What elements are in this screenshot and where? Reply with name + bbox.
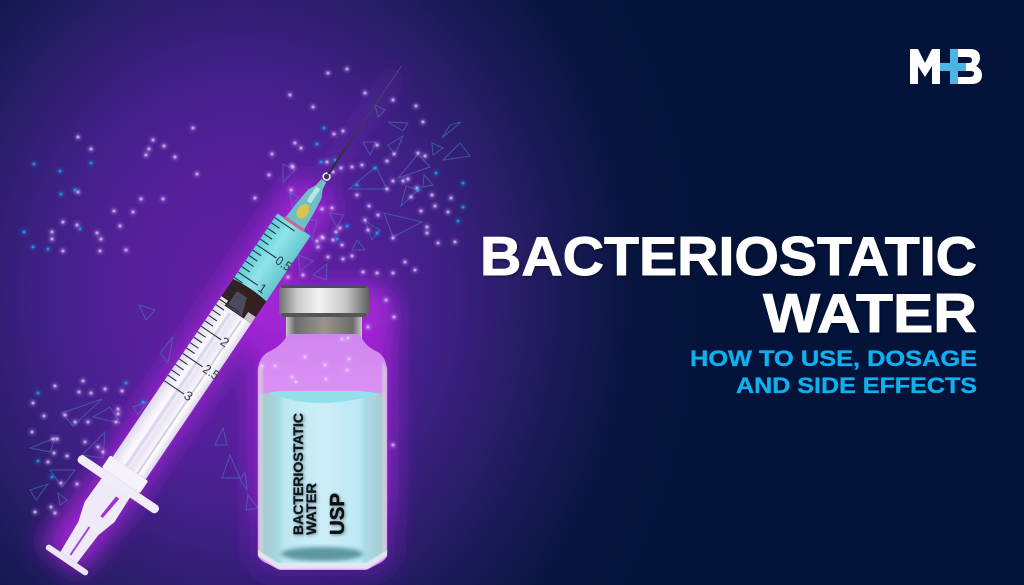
glow behind syringe and vial: [60, 70, 398, 576]
title line 1: BACTERIOSTATIC: [480, 225, 977, 287]
syringe: [26, 39, 441, 585]
subtitle: [690, 346, 977, 398]
barrel tip ring: [284, 216, 305, 232]
plunger stem: [54, 474, 133, 568]
vial side edge left: [258, 362, 263, 552]
vial: [258, 285, 387, 570]
vial bottom shadow: [281, 547, 363, 561]
vial glass body: [258, 334, 387, 570]
plunger end flange: [45, 543, 89, 577]
scale label: 1: 1: [255, 280, 270, 297]
vial neck: [286, 315, 362, 339]
vial label: water: WATER: [303, 483, 319, 535]
logo letter B: [950, 49, 982, 84]
logo plus: [940, 49, 966, 84]
vial front sparkle: [262, 338, 349, 382]
subtitle line 1: HOW TO USE, DOSAGE: [690, 346, 977, 371]
particles: blue dots: [24, 128, 463, 477]
vial base rim: [258, 550, 387, 569]
graduation ticks: [164, 218, 295, 394]
rubber stopper: [218, 278, 267, 324]
vial label: bacteriostatic: BACTERIOSTATIC: [290, 413, 306, 535]
barrel liquid: [233, 213, 311, 301]
subtitle line 2: AND SIDE EFFECTS: [736, 373, 977, 398]
vial cap: [279, 285, 369, 317]
scale label: 0.5: 0.5: [273, 253, 294, 274]
barrel with plunger rod: [113, 300, 252, 479]
vial label text: [290, 413, 349, 535]
barrel collar: [102, 455, 148, 493]
needle: [327, 65, 403, 175]
vial side edge right: [382, 362, 387, 552]
scale label: 3: 3: [181, 388, 196, 404]
particles: triangles: [30, 105, 470, 510]
particles: violet dots: [32, 69, 455, 513]
scale label: 2: 2: [218, 334, 232, 350]
water surface: [268, 391, 380, 403]
barrel flange: [76, 454, 161, 515]
title: [480, 225, 977, 344]
title line 2: WATER: [763, 282, 977, 344]
vial water: [260, 392, 385, 566]
nozzle: [286, 168, 338, 229]
logo: [910, 49, 982, 84]
vial label: usp: USP: [327, 493, 349, 535]
scale label: 2.5: 2.5: [200, 361, 222, 383]
logo letter M: [910, 49, 940, 84]
